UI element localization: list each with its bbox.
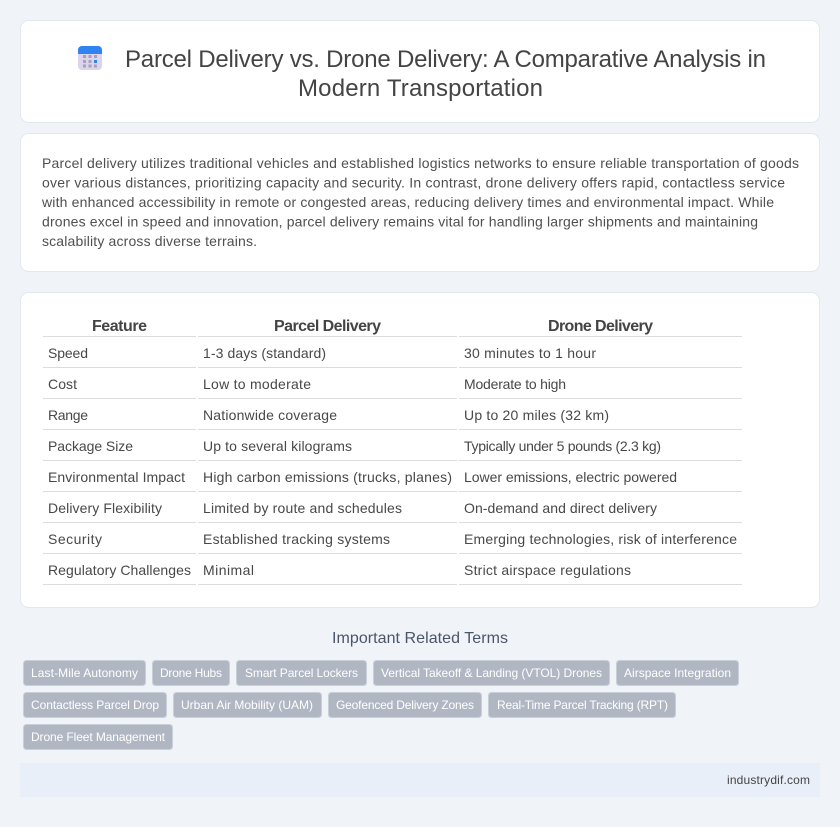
row: security: Established tracking systems — [203, 531, 390, 547]
tag: smart parcel lockers: Smart Parcel Lockers — [245, 666, 358, 680]
row: delivery flexibility — [48, 500, 657, 516]
text block: summary: over various distances, prioritizing capacity and security. In contrast, drone delivery offers rapid, contactless service — [42, 174, 785, 190]
table header: Drone Delivery — [548, 318, 653, 335]
panel: header — [20, 20, 820, 122]
row: range — [48, 407, 609, 423]
row: speed: Speed — [48, 345, 88, 361]
tag: geofenced delivery zones: Geofenced Delivery Zones — [336, 698, 474, 712]
row: cost: Moderate to high — [464, 376, 566, 392]
panel: summary paragraph — [20, 134, 820, 272]
tag: drone fleet management — [24, 724, 172, 750]
row: environmental impact: Environmental Impact — [48, 469, 185, 485]
text block: summary — [41, 155, 799, 249]
footer: industrydif.com — [727, 773, 810, 787]
row: environmental impact: Lower emissions, electric powered — [464, 469, 677, 485]
title — [125, 46, 766, 102]
row: regulatory challenges — [48, 562, 631, 578]
tag: smart parcel lockers — [236, 660, 366, 686]
title: Modern Transportation — [298, 75, 543, 102]
footer — [20, 763, 820, 797]
tag: last-mile autonomy: Last-Mile Autonomy — [31, 666, 138, 680]
row: delivery flexibility: Limited by route and schedules — [203, 500, 402, 516]
title: Parcel Delivery vs. Drone Delivery: A Comparative Analysis in — [125, 46, 766, 73]
row: environmental impact — [48, 469, 677, 485]
tag: urban air mobility — [174, 692, 322, 718]
row: security: Emerging technologies, risk of interference — [464, 531, 737, 547]
row: package size — [48, 438, 661, 454]
row: speed: 30 minutes to 1 hour — [464, 345, 596, 361]
tag: real-time parcel tracking — [488, 692, 676, 718]
tag: drone fleet management: Drone Fleet Management — [31, 730, 166, 744]
row: package size: Package Size — [48, 438, 133, 454]
row: regulatory challenges: Strict airspace regulations — [464, 562, 631, 578]
row: delivery flexibility: Delivery Flexibility — [48, 500, 162, 516]
row: security — [48, 531, 737, 547]
text block: summary: drones excel in speed and innovation, parcel delivery remains vital for handling larger shipments and maintaining — [42, 214, 758, 230]
table header: Feature — [92, 318, 147, 335]
tag: vtol drones: Vertical Takeoff & Landing (VTOL) Drones — [381, 666, 602, 680]
text block: summary: with enhanced accessibility in remote or congested areas, reducing delivery times and environmental impact. While — [41, 194, 774, 210]
table header: Parcel Delivery — [274, 318, 381, 335]
tag: contactless parcel drop — [24, 692, 166, 718]
row: package size: Typically under 5 pounds (2.3 kg) — [464, 438, 661, 454]
table header — [92, 318, 653, 335]
row: package size: Up to several kilograms — [203, 438, 352, 454]
row: range: Range — [48, 407, 88, 423]
icon: calendar — [78, 46, 102, 70]
row: regulatory challenges: Regulatory Challenges — [48, 562, 191, 578]
tag: last-mile autonomy — [24, 660, 146, 686]
tag: airspace integration: Airspace Integration — [624, 666, 731, 680]
text block: summary: Parcel delivery utilizes traditional vehicles and established logistics networks to ensure reliable transportation of goods — [42, 155, 799, 171]
text block: summary: scalability across diverse terrains. — [42, 233, 257, 249]
row: regulatory challenges: Minimal — [203, 562, 254, 578]
tag: contactless parcel drop: Contactless Parcel Drop — [31, 698, 159, 712]
tag: urban air mobility: Urban Air Mobility (UAM) — [181, 698, 313, 712]
row: cost: Cost — [48, 376, 77, 392]
row: range: Nationwide coverage — [203, 407, 337, 423]
heading: important related terms: Important Related Terms — [332, 630, 508, 647]
row: delivery flexibility: On-demand and direct delivery — [464, 500, 657, 516]
tag: airspace integration — [616, 660, 738, 686]
tag: drone hubs: Drone Hubs — [160, 666, 222, 680]
tag: real-time parcel tracking: Real-Time Parcel Tracking (RPT) — [497, 698, 668, 712]
row: range: Up to 20 miles (32 km) — [464, 407, 609, 423]
row: speed: 1-3 days (standard) — [203, 345, 326, 361]
row: speed — [48, 345, 596, 361]
row: environmental impact: High carbon emissions (trucks, planes) — [203, 469, 452, 485]
tags: related terms — [24, 660, 738, 750]
tag: geofenced delivery zones — [328, 692, 482, 718]
row: cost: Low to moderate — [203, 376, 311, 392]
row: cost — [48, 376, 566, 392]
panel: comparison table — [20, 292, 820, 608]
tag: vtol drones — [374, 660, 610, 686]
row: security: Security — [48, 531, 102, 547]
tag: drone hubs — [152, 660, 230, 686]
